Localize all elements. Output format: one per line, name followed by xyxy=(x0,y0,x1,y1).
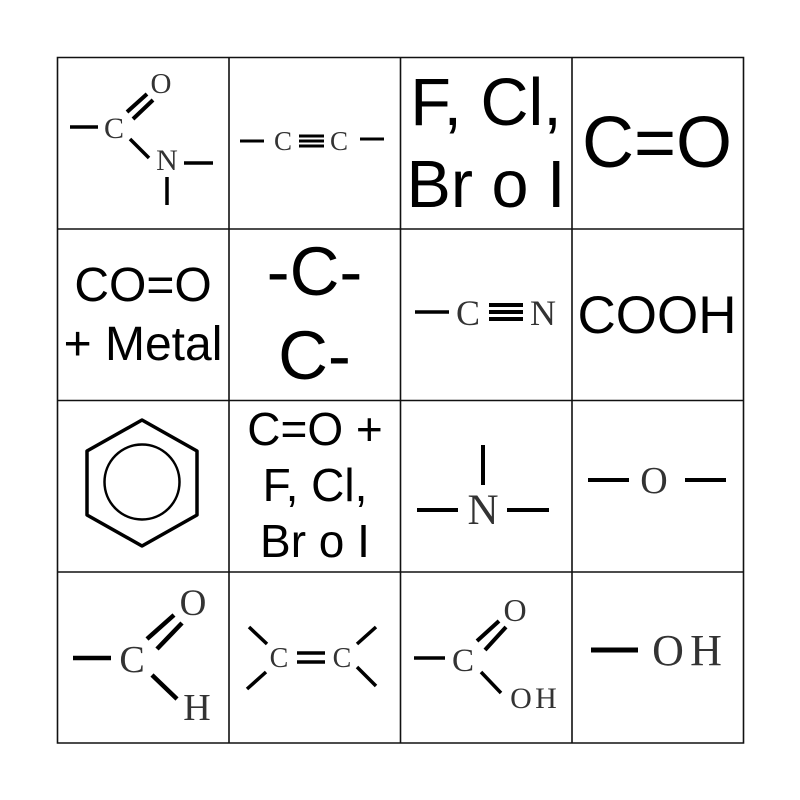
cell: alkyne structure: C xyxy=(330,126,348,156)
cell: -C-C- text xyxy=(267,233,362,394)
cell: amine structure: N xyxy=(467,487,499,534)
cell: acyl halide text: C=O + xyxy=(247,403,383,455)
cell: acyl halide text: Br o I xyxy=(260,515,370,567)
cell: amide structure: C xyxy=(104,112,124,145)
cell: nitrile structure: N xyxy=(530,293,556,333)
cell: COOH text: COOH xyxy=(578,286,736,345)
cell: CO=O + Metal text: CO=O xyxy=(74,259,212,312)
cell: acyl halide text xyxy=(247,403,383,567)
cell: alkyne structure xyxy=(240,126,384,156)
cell: aldehyde structure: H xyxy=(183,687,211,729)
cell: acyl halide text: F, Cl, xyxy=(263,459,367,511)
cell: aldehyde structure xyxy=(73,583,211,729)
cell: halogens text xyxy=(407,66,565,222)
cell: hydroxyl structure: O xyxy=(652,626,684,675)
cell: carboxylic acid structure: C xyxy=(452,643,474,679)
cell: ether structure xyxy=(588,460,726,502)
cell: nitrile structure xyxy=(415,293,556,333)
cell: -C-C- text: C- xyxy=(278,317,351,394)
cell: alkene structure xyxy=(247,627,376,689)
cell: -C-C- text: -C- xyxy=(267,233,362,310)
cell: hydroxyl structure: H xyxy=(690,626,722,675)
cell: benzene ring xyxy=(87,420,197,546)
cell: carboxylic acid structure: H xyxy=(535,682,557,715)
cell: carboxylic acid structure xyxy=(414,592,557,715)
cell: halogens text: Br o I xyxy=(407,148,565,222)
cell: alkyne structure: C xyxy=(274,126,292,156)
cell: alkene structure: C xyxy=(270,643,288,674)
cell: ether structure: O xyxy=(640,460,668,502)
cell: amide structure xyxy=(70,68,213,205)
cell: amide structure: N xyxy=(156,144,178,177)
cell: nitrile structure: C xyxy=(456,293,480,333)
cell: carboxylic acid structure: O xyxy=(510,682,532,715)
cell: hydroxyl structure xyxy=(591,626,722,675)
cell: amine structure xyxy=(417,445,549,534)
cell: amide structure: O xyxy=(151,68,171,100)
cell: carboxylic acid structure: O xyxy=(503,592,527,628)
cell: CO=O + Metal text xyxy=(64,259,222,371)
cell: carbonyl text: C=O xyxy=(582,103,732,183)
cell: aldehyde structure: C xyxy=(119,639,145,681)
cell: alkene structure: C xyxy=(333,643,351,674)
cell: CO=O + Metal text: + Metal xyxy=(64,318,222,371)
cell: halogens text: F, Cl, xyxy=(410,66,562,140)
cell: aldehyde structure: O xyxy=(180,583,206,624)
